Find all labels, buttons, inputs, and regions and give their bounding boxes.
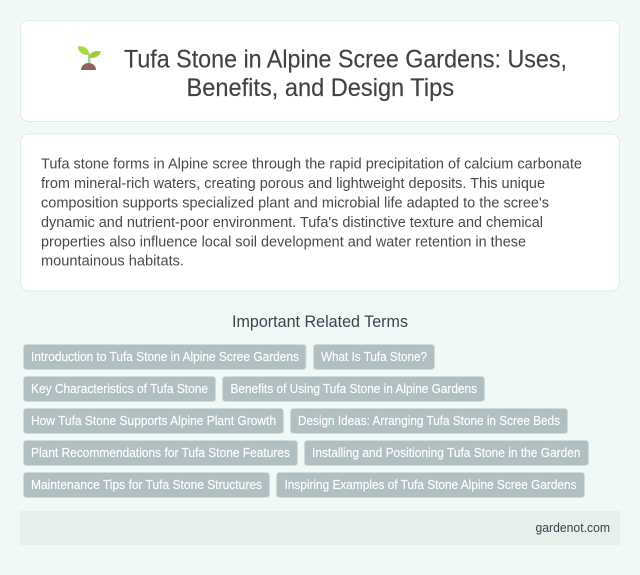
title — [124, 46, 567, 102]
tag — [290, 408, 568, 434]
title: Tufa Stone in Alpine Scree Gardens: Uses, — [124, 46, 567, 74]
heading: related terms: Important Related Terms — [232, 313, 408, 331]
source credit: gardenot.com — [536, 521, 610, 535]
icon: seedling — [78, 46, 101, 70]
description text: mountainous habitats. — [41, 253, 184, 269]
tag: Installing and Positioning Tufa Stone in the Garden — [312, 446, 581, 460]
tag: Plant Recommendations for Tufa Stone Features — [31, 446, 290, 460]
tag — [24, 344, 306, 370]
tag — [276, 472, 584, 498]
tag: How Tufa Stone Supports Alpine Plant Growth — [31, 414, 276, 428]
tag: What Is Tufa Stone? — [321, 350, 427, 364]
tag — [24, 408, 284, 434]
description text: Tufa stone forms in Alpine scree through the rapid precipitation of calcium carbonate — [41, 156, 582, 172]
description text: composition supports specialized plant and microbial life adapted to the scree's — [41, 195, 549, 211]
description text: from mineral-rich waters, creating porous and lightweight deposits. This unique — [41, 176, 545, 192]
tag: Design Ideas: Arranging Tufa Stone in Scree Beds — [298, 414, 560, 428]
footer — [20, 511, 620, 545]
tag — [24, 376, 216, 402]
tag — [24, 440, 298, 466]
tag — [304, 440, 588, 466]
description text — [41, 156, 582, 269]
tag: Introduction to Tufa Stone in Alpine Scree Gardens — [31, 350, 299, 364]
panel: description — [20, 134, 620, 291]
tag — [24, 472, 270, 498]
tag: Inspiring Examples of Tufa Stone Alpine Scree Gardens — [284, 478, 576, 492]
title: Benefits, and Design Tips — [186, 74, 454, 102]
related term tags — [24, 344, 588, 498]
description text: properties also influence local soil development and water retention in these — [41, 234, 526, 250]
description text: dynamic and nutrient-poor environment. Tufa's distinctive texture and chemical — [41, 215, 543, 231]
tag — [314, 344, 434, 370]
panel: title card — [20, 20, 620, 122]
tag: Maintenance Tips for Tufa Stone Structures — [31, 478, 262, 492]
tag: Benefits of Using Tufa Stone in Alpine Gardens — [230, 382, 477, 396]
tag — [222, 376, 484, 402]
tag: Key Characteristics of Tufa Stone — [31, 382, 208, 396]
